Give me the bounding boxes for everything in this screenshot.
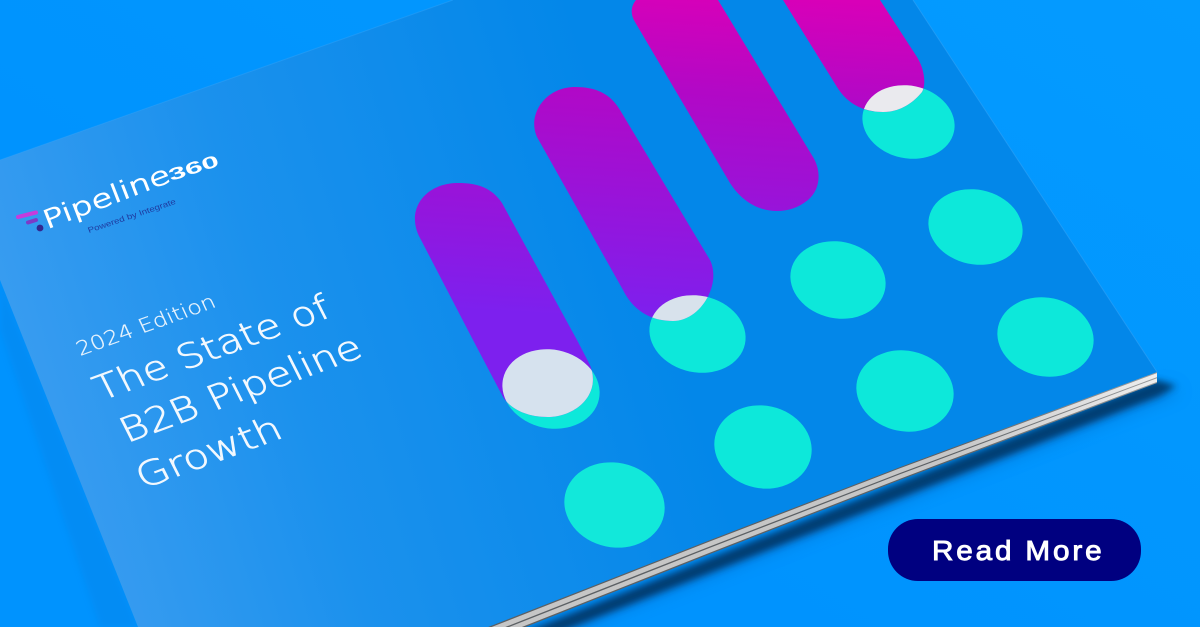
title: [87, 288, 369, 497]
overlap 4: [864, 85, 924, 112]
dot: [855, 77, 962, 167]
overlap 1: [502, 349, 593, 417]
button label: Read More: [932, 536, 1102, 567]
book shadow: [0, 280, 1180, 627]
title line 3: Growth: [129, 409, 289, 497]
book graphic: dots and bars: [415, 0, 1101, 557]
bar 4: [783, 0, 924, 112]
logo icon: [18, 212, 43, 231]
logo tagline: Powered by Integrate: [86, 197, 178, 235]
bar 3: [632, 0, 819, 211]
overlap 2: [652, 295, 708, 321]
dot: [556, 453, 673, 557]
dot: [495, 340, 607, 438]
logo wordmark: Pipeline: [39, 160, 174, 235]
logo: [18, 151, 222, 235]
title line 1: The State of: [87, 288, 338, 409]
bar 1: [415, 183, 593, 417]
dot: [990, 288, 1101, 386]
cover right edge highlight: [913, 0, 1157, 372]
dot: [921, 181, 1030, 273]
button shape: [888, 519, 1141, 581]
dot: [849, 341, 961, 441]
dot: [642, 286, 753, 382]
title line 2: B2B Pipeline: [113, 328, 369, 451]
read more button: [888, 519, 1141, 581]
logo 360: 360: [166, 151, 222, 185]
dot: [706, 396, 820, 498]
edition label: 2024 Edition: [72, 290, 219, 361]
book page edges: [470, 372, 1157, 627]
cover edge highlight: [0, 0, 453, 160]
dot: [783, 233, 893, 327]
bar 2: [534, 87, 713, 321]
